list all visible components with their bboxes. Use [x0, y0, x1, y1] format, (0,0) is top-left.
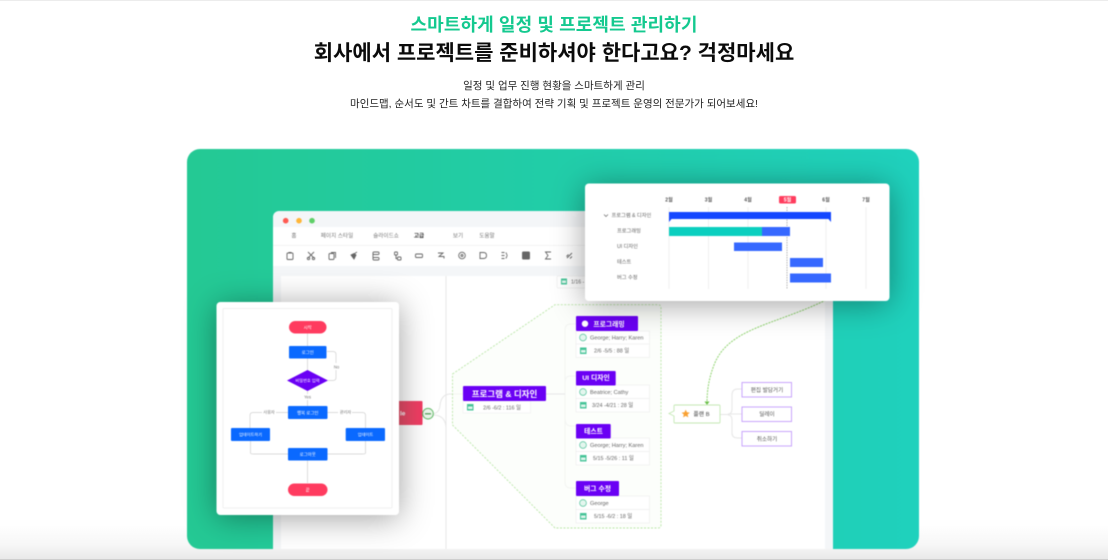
gantt row labels: 버그 수정 — [617, 273, 638, 281]
flow success — [288, 406, 328, 419]
flow connectors — [250, 333, 366, 483]
menu bar: 슬라이드쇼 — [373, 232, 399, 240]
task: 버그 수정: 5/15 -6/2 : 18 일 — [594, 512, 632, 520]
flowchart card — [216, 302, 399, 515]
option boxes — [742, 382, 792, 446]
red root node — [398, 401, 422, 425]
flow end — [288, 484, 328, 496]
flow login — [289, 346, 326, 358]
menu bar: 도움말 — [479, 232, 495, 240]
gantt month header: 7월 — [862, 196, 870, 204]
eyebrow heading: 스마트하게 일정 및 프로젝트 관리하기 — [411, 15, 697, 35]
task: 테스트: 5/15 -5/26 : 11 일 — [593, 454, 634, 462]
date chip — [557, 276, 584, 288]
gantt row labels: 프로그램 & 디자인 — [612, 211, 651, 219]
date chip: 1/16 - — [571, 280, 585, 286]
red root node: le — [400, 410, 406, 418]
gantt month header — [665, 196, 870, 204]
collapse button — [423, 408, 433, 419]
green background panel — [187, 149, 919, 549]
flow right box — [346, 428, 385, 441]
task: 버그 수정: 버그 수정 — [584, 484, 611, 493]
option labels — [751, 386, 783, 443]
task: 프로그래밍: George; Harry; Karen — [590, 336, 643, 342]
gantt row labels: UI 디자인 — [617, 242, 638, 250]
page bottom shade — [0, 525, 1108, 560]
flow right box: 업데이트 — [358, 431, 373, 438]
gantt chart card — [585, 184, 890, 301]
app window — [273, 211, 833, 556]
option labels: 편집 발담거기 — [751, 386, 783, 394]
task: UI 디자인: Beatrice; Cathy — [590, 390, 628, 396]
flow login: 로그인 — [302, 349, 314, 355]
flow branch labels: 사용자 — [263, 408, 275, 416]
menu bar — [291, 232, 495, 240]
gantt bars — [669, 212, 831, 282]
task: 버그 수정: George — [590, 501, 609, 507]
mind map connectors — [434, 378, 742, 438]
toolbar icons — [287, 252, 572, 260]
flow success: 행복 로그인 — [297, 409, 318, 416]
flow logout — [288, 448, 328, 460]
flow left box: 업데이트하기 — [239, 431, 262, 438]
main topic: 프로그램 & 디자인: 프로그램 & 디자인 — [472, 389, 537, 399]
menu bar: 보기 — [453, 232, 463, 240]
page top edge — [0, 0, 1108, 1]
flow start: 시작 — [304, 324, 312, 331]
dashed group boundary — [452, 305, 661, 528]
window traffic lights — [283, 218, 315, 224]
menu bar: 홈 — [291, 232, 297, 240]
flow decision: 비밀번호 입력 — [295, 377, 320, 384]
flow branch labels — [262, 363, 352, 416]
task: UI 디자인 — [576, 371, 650, 412]
description text — [350, 80, 758, 110]
gantt month header: 5월 — [784, 196, 792, 204]
dashed relation arrow — [704, 300, 826, 405]
flow logout: 로그아웃 — [300, 451, 316, 458]
flow end: 끝 — [306, 488, 310, 492]
option labels: 취소하기 — [757, 435, 777, 443]
task: 프로그래밍 — [576, 316, 650, 358]
task: 테스트 — [576, 424, 650, 465]
plan B node: 플랜 B — [693, 410, 710, 418]
flow branch labels: No — [334, 364, 340, 370]
task: 프로그래밍: 2/6 -5/5 : 88 일 — [594, 347, 629, 355]
task: UI 디자인: 3/24 -4/21 : 28 일 — [592, 401, 633, 409]
gantt month header: 3월 — [705, 196, 713, 204]
task: UI 디자인: UI 디자인 — [582, 373, 610, 382]
product illustration — [186, 148, 920, 550]
plan B node — [669, 405, 720, 423]
gantt row labels — [604, 211, 651, 281]
flow start — [289, 321, 326, 334]
gantt month header: 6월 — [822, 196, 830, 204]
description text: 일정 및 업무 진행 현황을 스마트하게 관리 — [463, 80, 645, 92]
gantt grid lines — [669, 207, 866, 289]
flow left box — [231, 428, 270, 441]
main topic: 프로그램 & 디자인: 2/6 -6/2 : 116 일 — [483, 403, 521, 411]
description text: 마인드맵, 순서도 및 간트 차트를 결합하여 전략 기획 및 프로젝트 운영의 전문가가 되어보세요! — [350, 98, 758, 110]
main topic: 프로그램 & 디자인 — [462, 385, 547, 412]
main heading: 회사에서 프로젝트를 준비하셔야 한다고요? 걱정마세요 — [314, 42, 794, 65]
task: 테스트: George; Harry; Karen — [590, 443, 643, 449]
menu bar: 고급 — [414, 232, 424, 240]
option labels: 딜레이 — [759, 410, 775, 418]
gantt month header: 2월 — [665, 196, 673, 204]
menu bar: 페이지 스타일 — [321, 232, 353, 240]
gantt month header: 4월 — [744, 196, 752, 204]
flow decision — [287, 370, 328, 391]
gantt row labels: 테스트 — [617, 258, 632, 266]
task: 프로그래밍: 프로그래밍 — [593, 320, 625, 328]
gantt row labels: 프로그래밍 — [617, 226, 641, 234]
flow branch labels: 관리자 — [340, 408, 351, 416]
flow branch labels: Yes — [304, 394, 311, 400]
task: 버그 수정 — [576, 481, 650, 523]
task: 테스트: 테스트 — [584, 426, 603, 436]
